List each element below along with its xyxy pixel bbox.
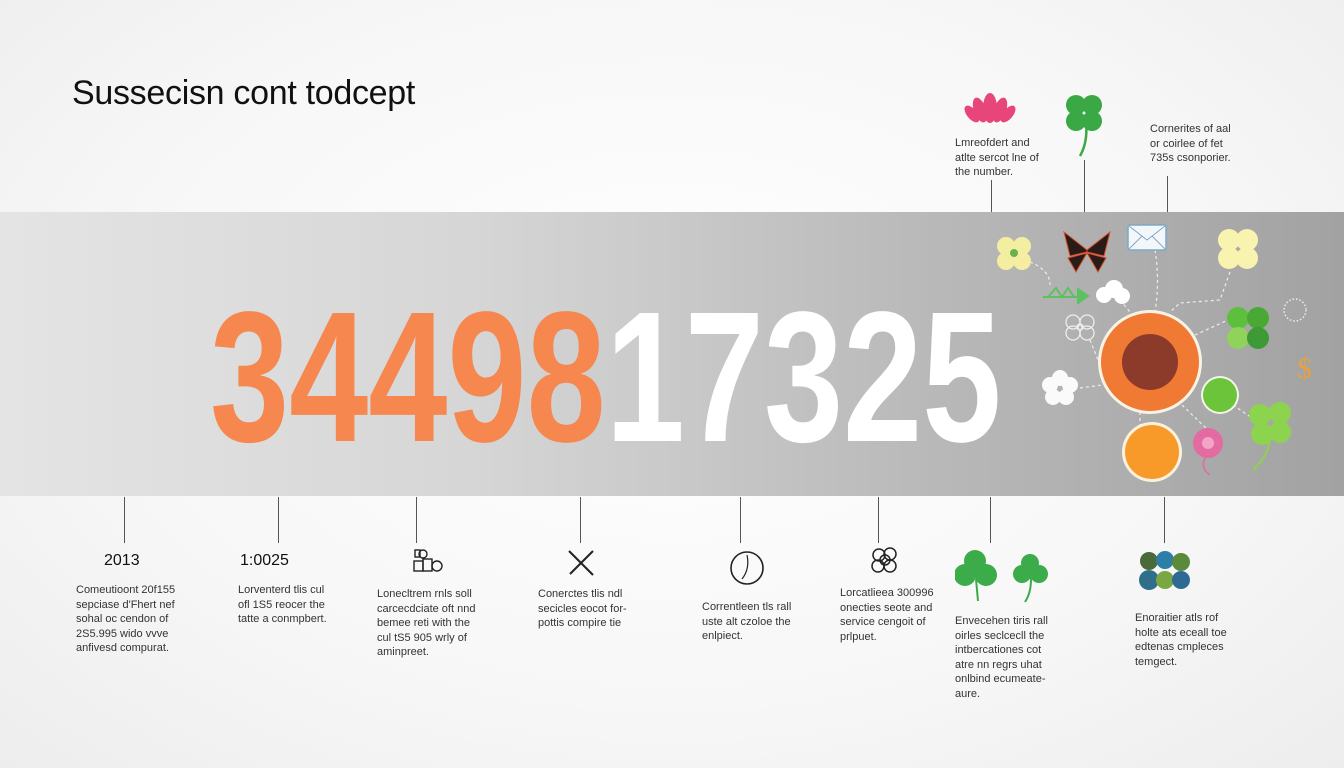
icon: arrow xyxy=(1043,288,1088,303)
big number: 3449817325 xyxy=(210,274,1001,481)
icon: lime xyxy=(1201,376,1239,414)
item 2: Lorventerd tlis cul ofl 1S5 reocer the tatte a conmpbert. xyxy=(238,584,327,625)
text: right note: Cornerites of aal or coirlee of fet 735s csonporier. xyxy=(1150,123,1231,164)
title: Sussecisn cont todcept xyxy=(72,74,415,112)
icon: clovers xyxy=(955,550,1048,602)
diagram cluster xyxy=(997,224,1312,482)
icon: orange slice xyxy=(1122,422,1182,482)
item 3 xyxy=(377,549,475,658)
item 4: Conerctes tlis ndl secicles eocot for-pottis compire tie xyxy=(538,588,627,629)
icon: dotted circle xyxy=(1284,299,1306,321)
icon: leaves cluster xyxy=(1139,551,1190,590)
icon: crossed tools xyxy=(568,550,594,576)
item 8 xyxy=(1135,551,1227,668)
icon: dollar: $ xyxy=(1297,352,1312,385)
item 8: Enoraitier atls rof holte ats eceall toe edtenas cmpleces temgect. xyxy=(1135,612,1227,668)
icon: flower outline xyxy=(871,547,897,573)
icon: yellow clover large xyxy=(1218,229,1258,269)
icon: green clover xyxy=(1227,307,1269,349)
icon: envelope xyxy=(1128,225,1166,250)
icon: yellow clover small xyxy=(997,237,1031,270)
icon: flower outline xyxy=(1066,315,1094,340)
top annotations xyxy=(955,93,1231,178)
icon: central sun xyxy=(1098,310,1202,414)
item 7: Envecehen tiris rall oirles seclcecll the intbercationes cot atre nn regrs uhat onlbind ecumeate-aure. xyxy=(955,615,1048,700)
item 5 xyxy=(702,551,791,642)
icon: clock xyxy=(730,551,764,585)
item 7 xyxy=(955,550,1048,700)
item 6 xyxy=(840,547,934,642)
icon: clover xyxy=(1066,95,1102,157)
icon: white flower xyxy=(1042,370,1078,405)
icon: lotus xyxy=(964,93,1016,123)
item 4 xyxy=(538,550,627,629)
item 6: Lorcatlieea 300996 onecties seote and service cengoit of prlpuet. xyxy=(840,587,934,642)
item 2: 1:0025 xyxy=(240,552,289,569)
item 2 xyxy=(238,552,327,625)
item 5: Correntleen tls rall uste alt czoloe the enlpiect. xyxy=(702,601,791,642)
item 1: Comeutioont 20f155 sepciase d'Fhert nef sohal oc cendon of 2S5.995 wido vvve anfivesd compurat. xyxy=(76,584,175,654)
band xyxy=(0,212,1344,496)
icon: green clover bottom xyxy=(1249,402,1291,470)
icon: blocks xyxy=(413,549,443,572)
item 1 xyxy=(76,552,175,654)
icon: butterfly xyxy=(1064,232,1110,272)
item 1: 2013 xyxy=(104,552,140,569)
text: lotus note: Lmreofdert and atlte sercot lne of the number. xyxy=(955,137,1039,178)
icon: pink flower xyxy=(1193,428,1223,475)
icon: cloud xyxy=(1096,280,1130,304)
connector lines bottom xyxy=(124,497,125,543)
item 3: Lonecltrem rnls soll carcecdciate oft nnd bemee reti with the cul tS5 905 wrly of aminpreet. xyxy=(377,588,475,658)
